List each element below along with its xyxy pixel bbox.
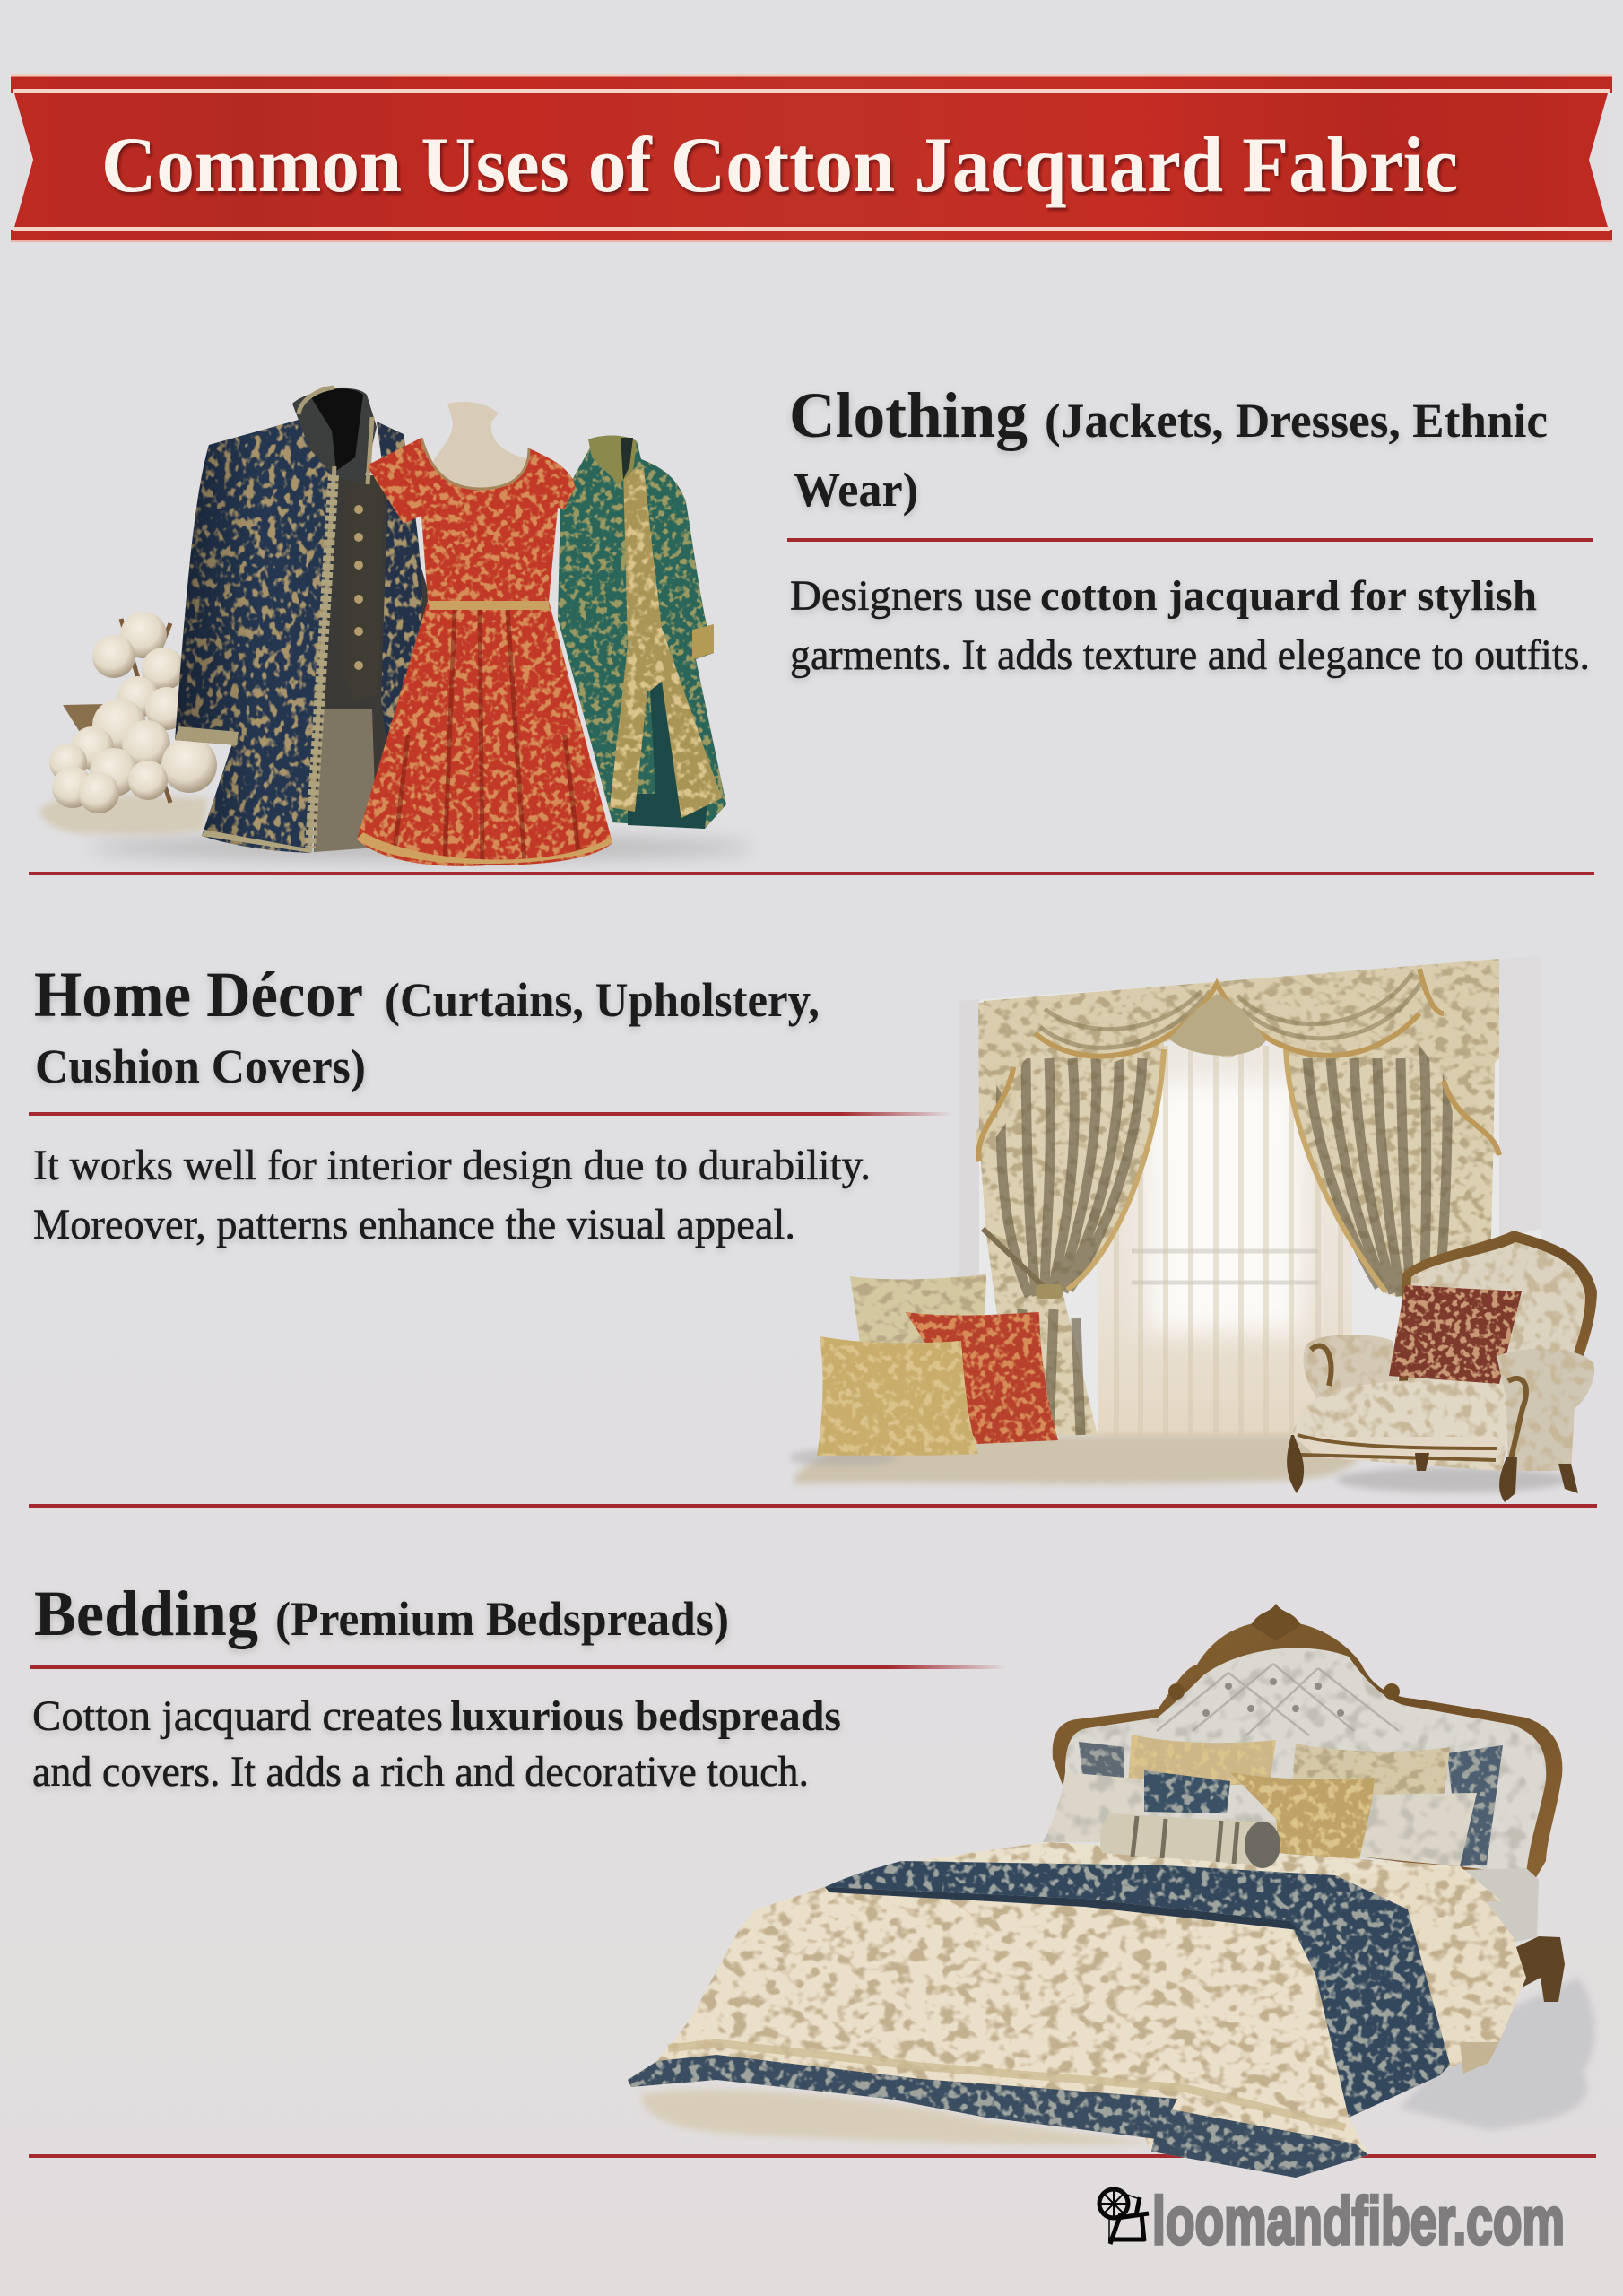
- valance swags: [976, 959, 1499, 1161]
- illustration: bed with jacquard bedspread: [628, 1604, 1594, 2178]
- headboard: [1053, 1604, 1562, 1879]
- right curtain: [1286, 978, 1497, 1318]
- sheet: [1460, 1868, 1539, 1942]
- bedding text block: [30, 1578, 1007, 1796]
- sheer panel and window: [1098, 1046, 1352, 1437]
- mannequin neck: [430, 402, 529, 502]
- cushion: front gold: [817, 1336, 978, 1456]
- cushion: back gold: [850, 1274, 986, 1354]
- heading: home decor: Cushion Covers): [35, 1039, 366, 1093]
- heading: bedding: Bedding: [34, 1578, 258, 1649]
- body: clothing: [790, 572, 1590, 679]
- bed post and frame: [1462, 1936, 1565, 2013]
- heading: bedding: [34, 1578, 729, 1649]
- green kurta: [558, 436, 726, 829]
- home decor text block: [29, 959, 952, 1248]
- rope trim: [668, 2043, 1345, 2127]
- floor shadow and rug: [1399, 1978, 1594, 2130]
- body: bedding: [32, 1692, 841, 1796]
- bolster: [1100, 1813, 1280, 1868]
- fringe: [1460, 2042, 1499, 2074]
- icon: spinning wheel: [1099, 2189, 1149, 2244]
- heading: clothing: (Jackets, Dresses, Ethnic: [1045, 394, 1548, 448]
- cushion: red: [906, 1312, 1058, 1444]
- pillows: [1043, 1735, 1503, 1866]
- heading: home decor: (Curtains, Upholstery,: [385, 973, 820, 1027]
- main bedspread: [628, 1887, 1368, 2178]
- heading: clothing: Wear): [794, 463, 918, 517]
- body: home decor: Moreover, patterns enhance the visual appeal.: [33, 1201, 795, 1248]
- cotton bolls: [39, 612, 217, 835]
- navy border: [628, 2055, 1177, 2139]
- heading: clothing: [789, 379, 1548, 517]
- illustration: curtains, cushions and armchair: [789, 956, 1597, 1502]
- heading: home decor: Home Décor: [34, 959, 363, 1031]
- heading: home decor: [34, 959, 820, 1093]
- body: clothing: Designers use: [790, 572, 1032, 620]
- red dress: [357, 438, 612, 866]
- heading: clothing: Clothing: [789, 379, 1028, 451]
- clothing text block: [787, 379, 1593, 679]
- navy runner: [825, 1861, 1450, 2118]
- body: bedding: luxurious bedspreads: [450, 1692, 841, 1740]
- bed top: [897, 1842, 1502, 1901]
- navy jacket: [175, 387, 430, 853]
- left curtain: [978, 991, 1164, 1435]
- body: clothing: garments. It adds texture and elegance to outfits.: [790, 631, 1590, 679]
- body: home decor: It works well for interior design due to durability.: [33, 1142, 871, 1189]
- wall panel: [959, 959, 1541, 1435]
- floor rug: [794, 1435, 1363, 1484]
- armchair: [1287, 1231, 1597, 1502]
- illustration: jacquard garments and cotton bolls: [39, 387, 753, 866]
- body: clothing: cotton jacquard for stylish: [1040, 572, 1537, 620]
- footer site mark: [1099, 2183, 1565, 2258]
- body: bedding: and covers. It adds a rich and decorative touch.: [32, 1748, 809, 1796]
- body: home decor: [33, 1142, 871, 1248]
- title banner: [11, 74, 1612, 242]
- title: Common Uses of Cotton Jacquard Fabric: [101, 122, 1458, 209]
- cream right drop: [1335, 1866, 1526, 2068]
- heading: bedding: (Premium Bedspreads): [275, 1592, 729, 1646]
- body: bedding: Cotton jacquard creates: [32, 1692, 443, 1740]
